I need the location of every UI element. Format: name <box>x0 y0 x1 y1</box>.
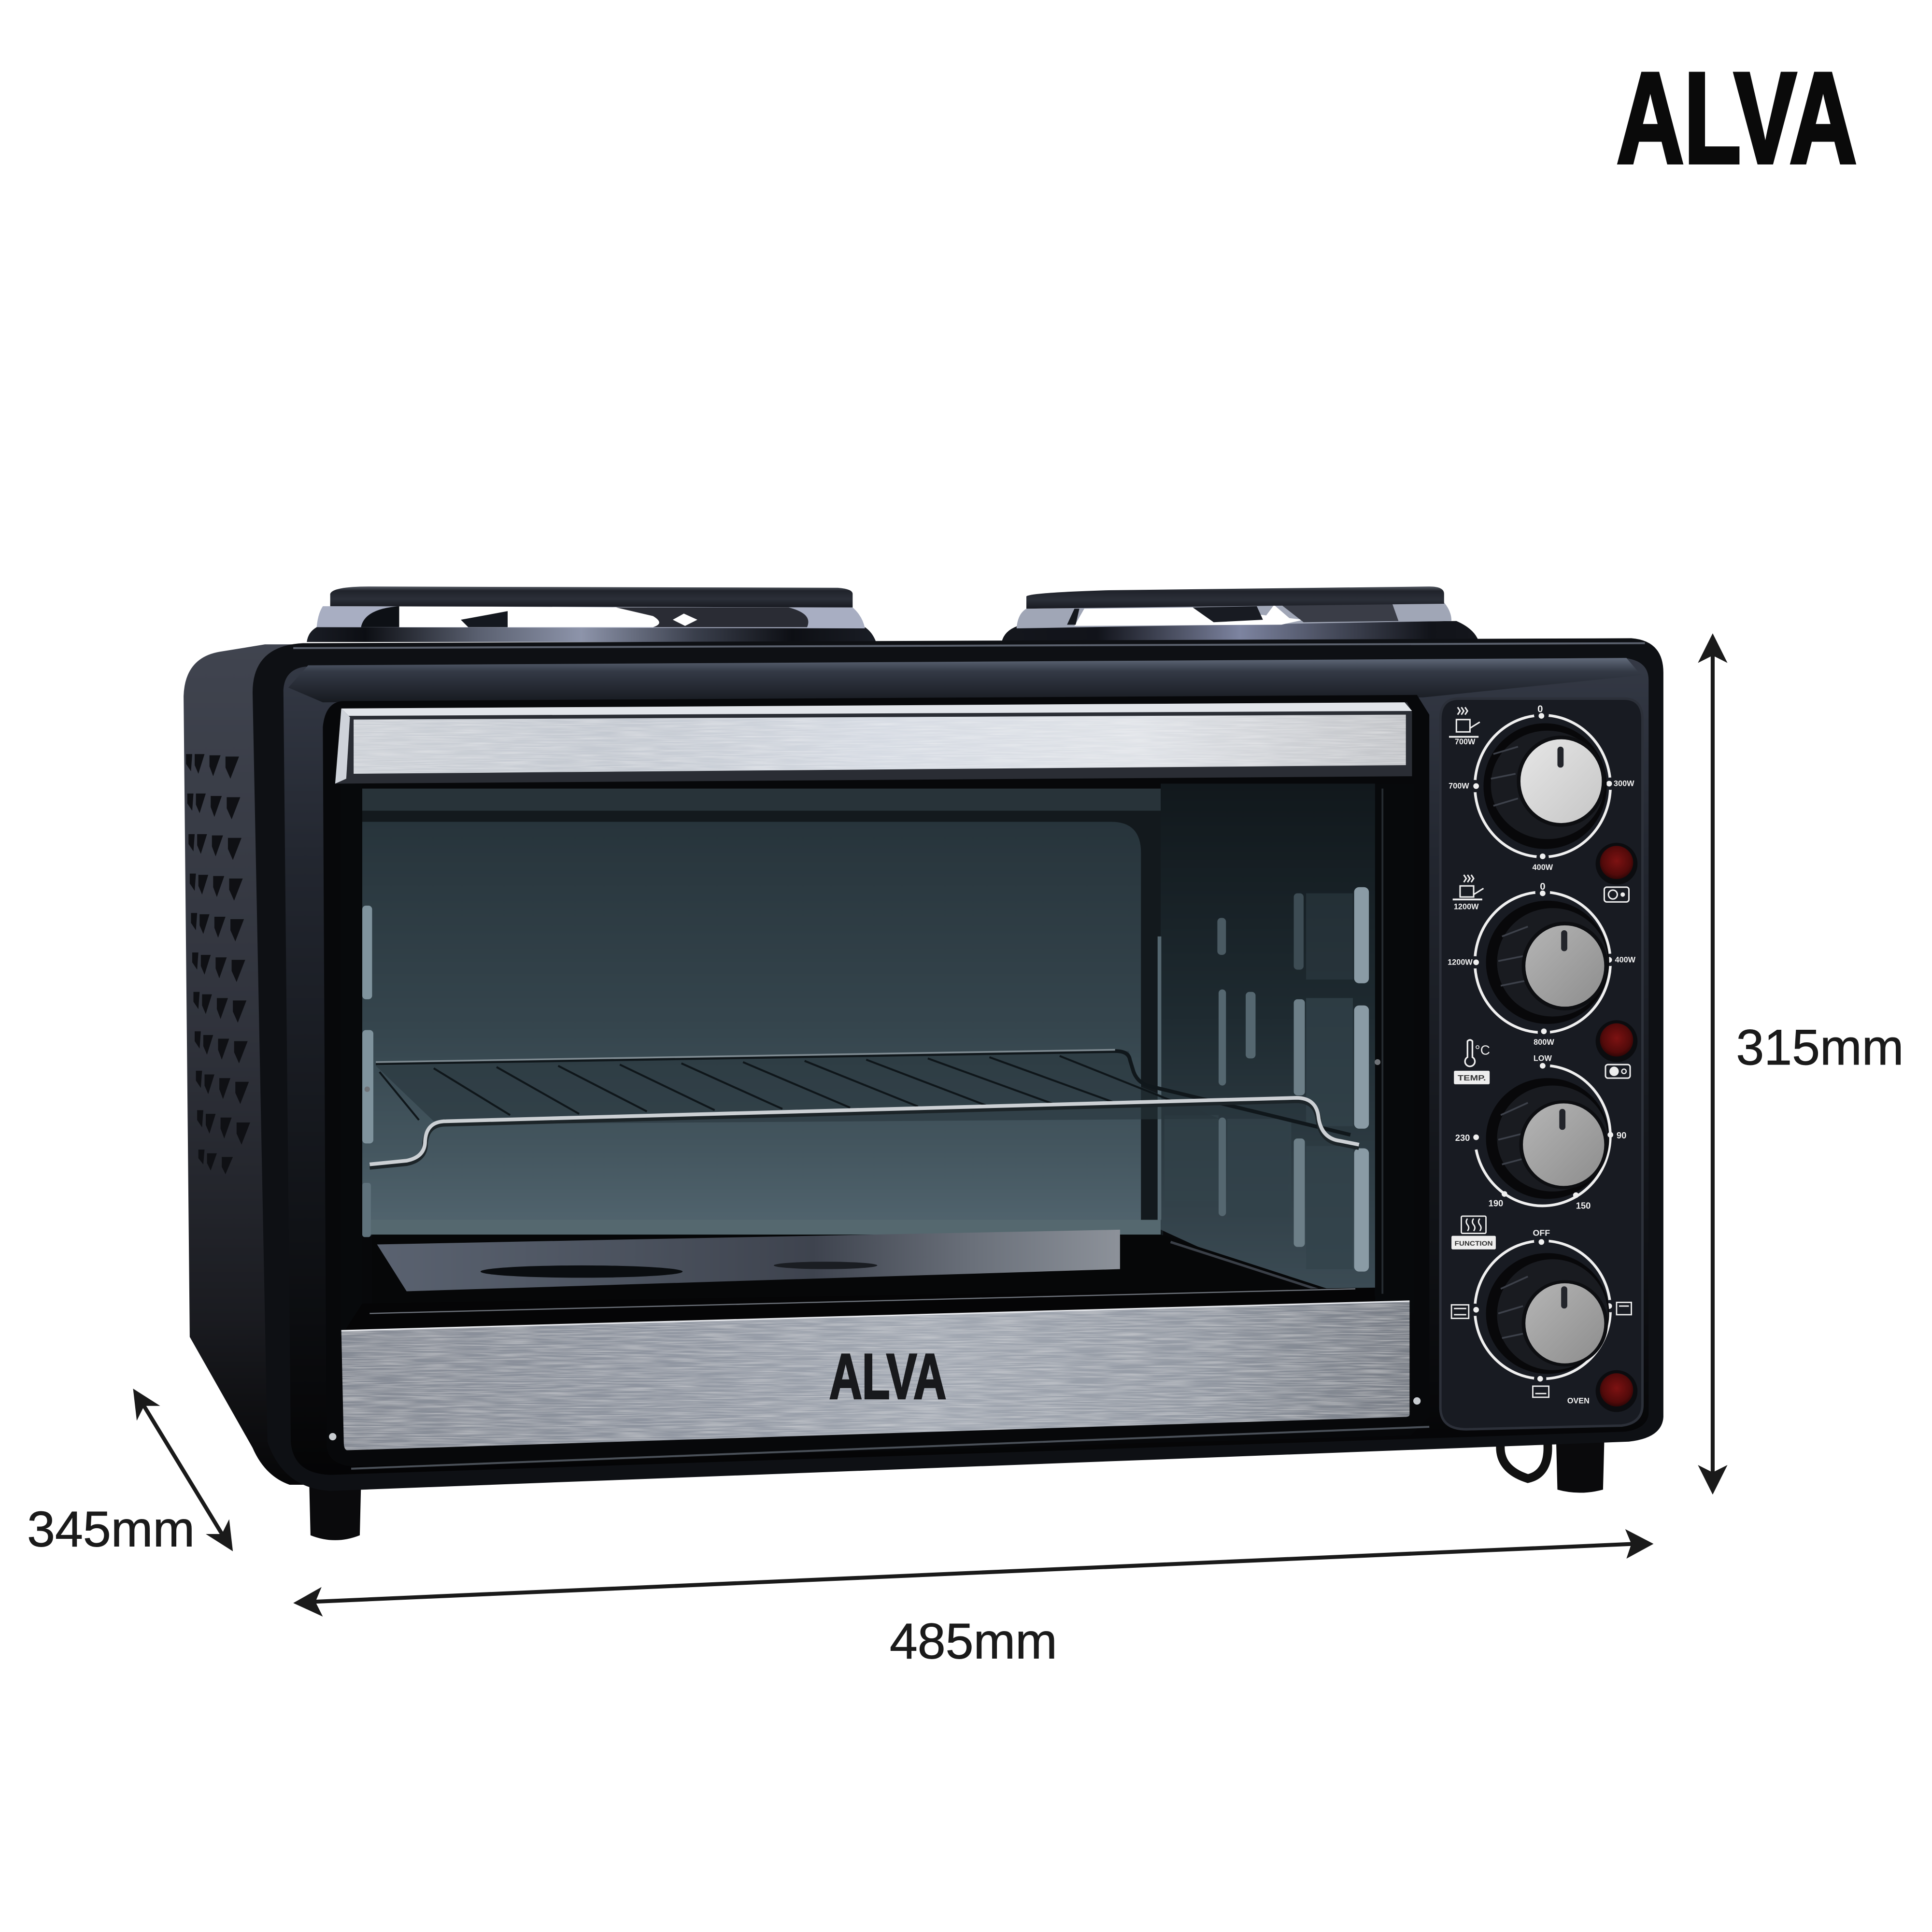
label: TEMP <box>1454 1071 1490 1084</box>
right window edge <box>1375 783 1415 1313</box>
icon: thermometer with degrees C: °C <box>1475 1043 1490 1058</box>
left hotplate <box>307 586 876 642</box>
label: FUNCTION: FUNCTION <box>1454 1240 1493 1248</box>
icon: 700W pot <box>1449 707 1480 746</box>
door window cavity <box>340 783 1415 1338</box>
icon: function heating <box>1462 1216 1486 1234</box>
label: height dimension: 315mm <box>1736 1020 1904 1076</box>
arrow: width <box>293 1529 1653 1617</box>
door lower seam <box>351 1427 1429 1469</box>
raised front frame <box>284 658 1648 1475</box>
knob 2: 1200W hotplate: 0 <box>1540 881 1546 892</box>
knob 3: temperature: LOW <box>1534 1054 1552 1063</box>
top frame highlight <box>288 658 1641 702</box>
left window edge <box>340 783 362 1338</box>
handle steel plate <box>354 715 1406 774</box>
arrow: height <box>1698 633 1728 1494</box>
right hotplate <box>1002 586 1478 642</box>
cavity groove surround <box>362 811 1163 1236</box>
plate top edge highlight <box>341 1301 1409 1331</box>
wall bottom ledge <box>362 1220 1161 1235</box>
handle left edge <box>335 709 350 783</box>
cavity right wall <box>1161 783 1375 1296</box>
knob 1: 700W hotplate: 400W <box>1533 863 1553 872</box>
tray front edge <box>369 1289 1355 1313</box>
icon: thermometer with degrees C <box>1465 1040 1490 1066</box>
door screws <box>329 1059 1421 1440</box>
knob 3: temperature: 230 <box>1455 1133 1470 1143</box>
knob 4: function: OVEN <box>1567 1397 1590 1406</box>
label: depth dimension: 345mm <box>27 1502 195 1558</box>
oven side panel with vents <box>184 644 320 1485</box>
left foot <box>309 1485 361 1540</box>
icon: 1200W pot: 1200W <box>1454 903 1479 911</box>
knob 3: temperature: 150 <box>1576 1201 1591 1211</box>
knob 3: temperature: 190 <box>1489 1198 1503 1208</box>
label: width dimension: 485mm <box>890 1614 1057 1670</box>
oven product illustration <box>184 586 1663 1540</box>
knob 4: function: OFF <box>1533 1228 1550 1238</box>
knob 1: 700W hotplate: 0 <box>1537 704 1543 714</box>
side wall panels <box>1165 893 1353 1269</box>
icon: right plate indicator <box>1605 1065 1630 1078</box>
handle highlight strip <box>341 702 1412 716</box>
arrow: depth <box>133 1389 233 1551</box>
baking tray <box>372 1230 1343 1313</box>
door recess <box>323 695 1429 1466</box>
top door handle: chrome edge <box>335 702 1412 783</box>
cavity back wall <box>362 822 1141 1222</box>
knob 3: temperature <box>1455 1054 1626 1211</box>
side vents <box>186 754 250 1174</box>
knob 1: 700W hotplate: 300W <box>1614 780 1634 788</box>
knob 3: temperature: 90 <box>1617 1130 1626 1140</box>
label: FUNCTION <box>1451 1236 1496 1250</box>
side wall embossed highlights <box>1217 887 1369 1272</box>
cavity ceiling band <box>362 789 1176 811</box>
knob 2: 1200W hotplate: 800W <box>1534 1038 1554 1047</box>
knob 4: function <box>1469 1228 1617 1406</box>
knob 2: 1200W hotplate: 1200W <box>1448 958 1473 966</box>
indicator lights <box>1596 843 1637 1412</box>
control panel <box>1440 698 1643 1429</box>
knob 1: 700W hotplate <box>1449 704 1634 872</box>
top edge groove <box>293 643 1645 648</box>
oven front body <box>253 638 1663 1491</box>
wire rack <box>369 1050 1359 1167</box>
knob 1: 700W hotplate: 700W <box>1449 782 1469 791</box>
icon: left plate indicator <box>1604 887 1629 902</box>
tray shadow strip <box>340 1288 1375 1338</box>
back-corner highlight <box>1159 937 1160 1220</box>
icons: oven modes <box>1451 1302 1632 1397</box>
knob 2: 1200W hotplate <box>1448 881 1636 1047</box>
label: TEMP: TEMP. <box>1458 1074 1486 1082</box>
knob 2: 1200W hotplate: 400W <box>1615 955 1636 964</box>
icon: 1200W pot <box>1453 875 1483 911</box>
front brand: ALVA: ALVA <box>829 1341 946 1412</box>
right foot and power cord <box>1500 1442 1604 1493</box>
left wall highlights <box>362 906 373 1237</box>
lower door steel plate <box>341 1301 1409 1450</box>
icon: 700W pot: 700W <box>1455 738 1476 746</box>
